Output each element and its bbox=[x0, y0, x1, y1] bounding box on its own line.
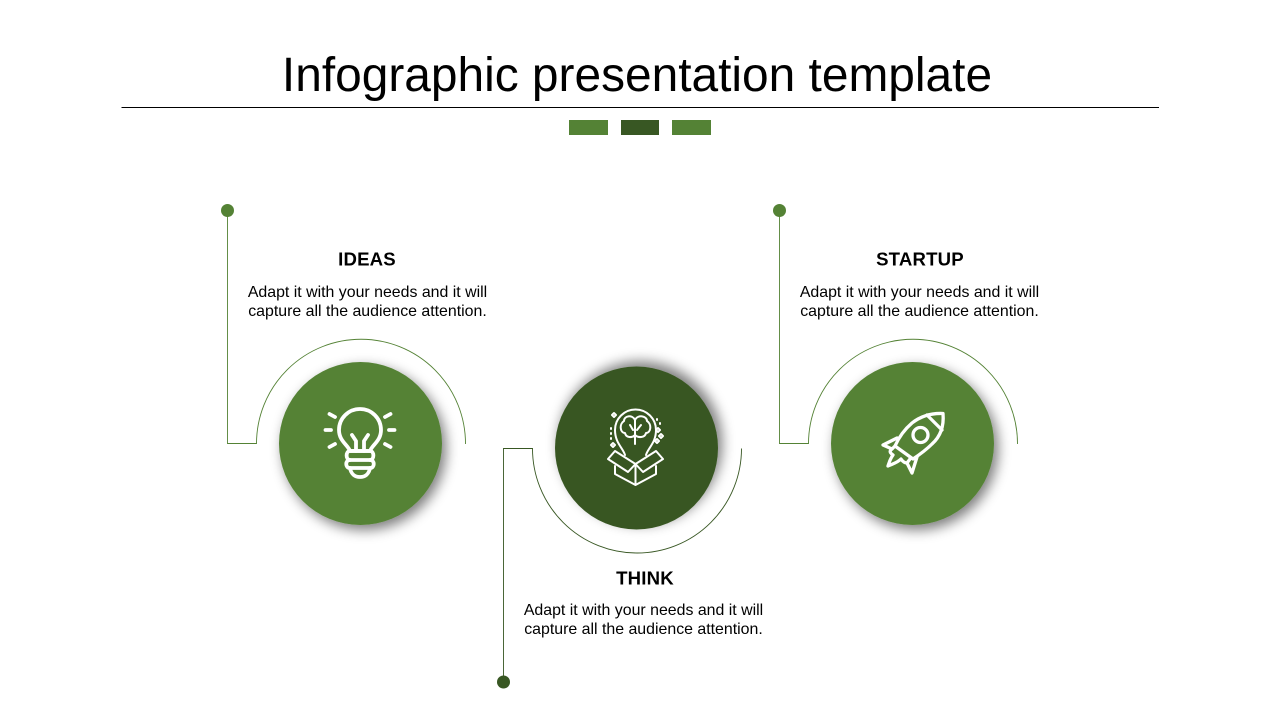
panel: think bbox=[497, 366, 763, 688]
startup text: Adapt it with your needs and it will bbox=[800, 284, 1039, 301]
ideas circle bbox=[279, 362, 442, 525]
ideas dot bbox=[221, 204, 234, 217]
icon: brain in box bbox=[608, 409, 663, 485]
think text: capture all the audience attention. bbox=[524, 621, 763, 638]
accent squares bbox=[569, 120, 711, 135]
think text: Adapt it with your needs and it will bbox=[524, 602, 763, 619]
startup heading: STARTUP bbox=[876, 248, 964, 270]
think heading: THINK bbox=[616, 568, 674, 588]
ideas connector bbox=[228, 211, 466, 444]
panel: ideas bbox=[221, 204, 487, 525]
startup circle bbox=[831, 362, 994, 525]
think dot bbox=[497, 676, 510, 688]
startup text: capture all the audience attention. bbox=[800, 303, 1039, 320]
icon: rocket bbox=[883, 413, 943, 473]
think circle bbox=[555, 366, 718, 530]
ideas heading: IDEAS bbox=[338, 248, 396, 270]
icon: light bulb bbox=[326, 409, 394, 477]
ideas text: Adapt it with your needs and it will bbox=[248, 284, 487, 301]
startup dot bbox=[773, 204, 786, 217]
think connector bbox=[504, 448, 742, 682]
startup connector bbox=[780, 211, 1018, 444]
ideas text: capture all the audience attention. bbox=[248, 303, 487, 320]
title: Infographic presentation template bbox=[282, 49, 992, 102]
panel: startup bbox=[773, 204, 1039, 525]
